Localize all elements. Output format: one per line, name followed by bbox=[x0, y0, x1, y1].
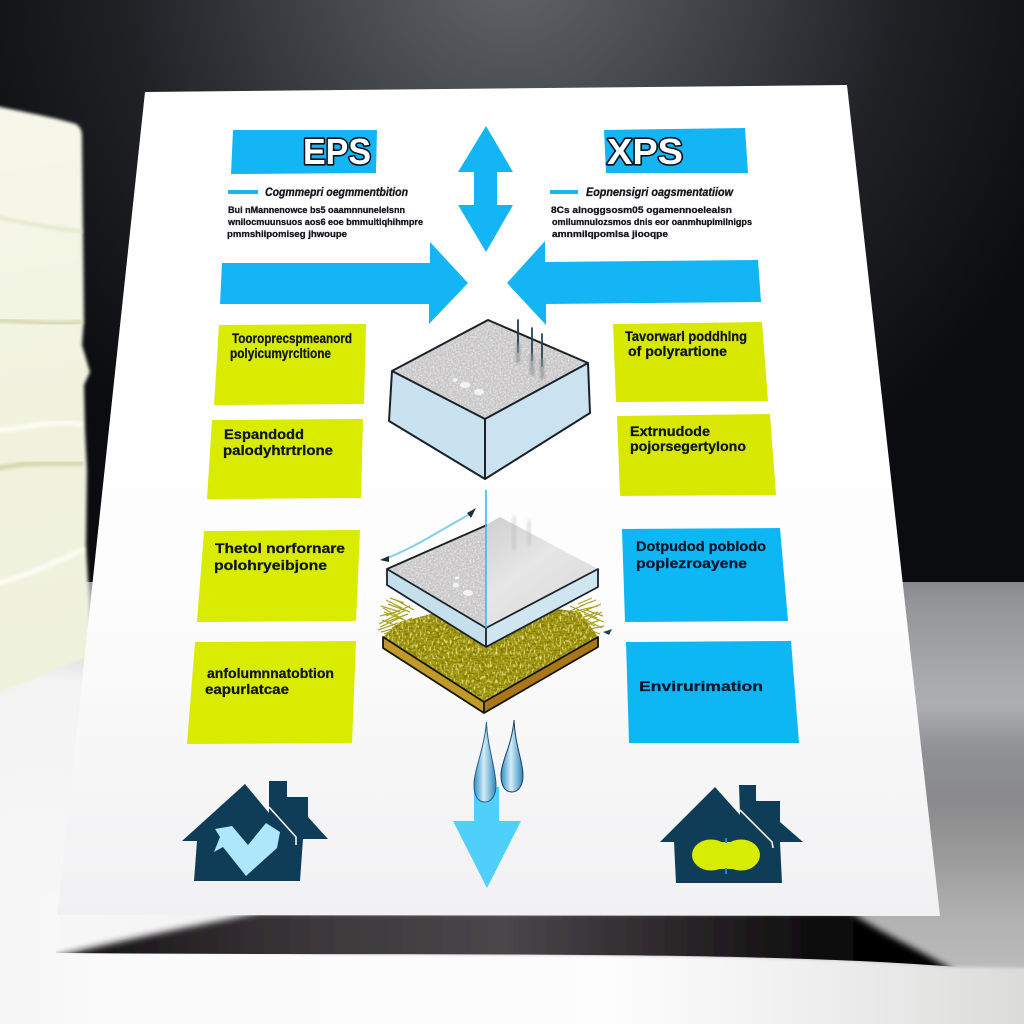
panel: right card 3: poplezroayene bbox=[636, 556, 748, 571]
panel: left card 3: polohryeibjone bbox=[214, 558, 328, 573]
panel: left card 2: palodyhtrtrlone bbox=[223, 443, 334, 458]
panel: left card 4: eapurlatcae bbox=[205, 682, 290, 697]
blue divider line bbox=[485, 490, 487, 628]
arrow: downward light blue bbox=[453, 787, 521, 888]
panel: right card 1: Tavorwarl poddhlng bbox=[625, 329, 747, 344]
icon: water drops bbox=[474, 720, 523, 802]
mat surface bbox=[383, 600, 598, 702]
panel: left card 2 bbox=[207, 419, 363, 499]
panel: left card 4 bbox=[187, 641, 356, 744]
EPS title: EPS bbox=[303, 131, 371, 172]
EPS banner bbox=[231, 130, 377, 174]
panel: left card 1: polyicumyrcltione bbox=[230, 346, 331, 361]
EPS description: wnilocmuunsuos aos6 eoe bmmuitiqhihmpre bbox=[227, 217, 423, 228]
illustration: upper foam block bbox=[389, 320, 590, 479]
panel: left card 3 bbox=[197, 530, 360, 622]
XPS description: omilumnulozsmos dnis eor oanmhupimilnigps bbox=[552, 217, 752, 228]
panel: right card 4: Envirurimation bbox=[639, 679, 763, 694]
XPS column header bbox=[550, 128, 752, 240]
panel: right card 2: Extrnudode bbox=[630, 424, 711, 439]
arrow: small tick near mat bbox=[603, 629, 612, 635]
arrow: large right-pointing bbox=[220, 242, 468, 324]
mat fibres bbox=[378, 598, 604, 634]
panel: left card 1 bbox=[214, 324, 366, 405]
panel: right card 3 bbox=[622, 528, 788, 622]
XPS banner bbox=[604, 128, 748, 173]
XPS subheading: Eopnensigri oagsmentatiiow bbox=[586, 187, 734, 199]
arrow: vertical double-headed bbox=[458, 126, 513, 252]
foam insulation stack bbox=[0, 104, 90, 697]
needles on block bbox=[518, 320, 542, 378]
background wall bbox=[0, 0, 1024, 600]
panel: left card 2: Espandodd bbox=[224, 427, 304, 442]
XPS title: XPS bbox=[607, 131, 683, 172]
panel: left card 4: anfolumnnatobtion bbox=[207, 666, 334, 681]
panel: right card 2 bbox=[617, 414, 776, 496]
illustration: fibre mat layer bbox=[378, 598, 604, 713]
illustration: thin foam slab bbox=[387, 490, 598, 647]
panel: right card 3: Dotpudod poblodo bbox=[636, 539, 766, 554]
paper sheet bbox=[57, 85, 940, 916]
XPS description: amnmilqpomlsa jiooqpe bbox=[552, 229, 668, 240]
background floor bbox=[0, 582, 1024, 1024]
EPS description bbox=[227, 205, 423, 240]
panel: right card 4 bbox=[626, 641, 799, 743]
panel: left card 1: Tooroprecspmeanord bbox=[232, 331, 352, 346]
arrow: large left-pointing bbox=[507, 241, 761, 325]
EPS column header bbox=[227, 130, 423, 240]
XPS description bbox=[551, 205, 752, 240]
icon: house with yellow blob bbox=[660, 785, 803, 883]
icon: house with check mark bbox=[182, 781, 328, 881]
paper shadow bbox=[56, 915, 956, 967]
XPS legend dash bbox=[550, 190, 578, 194]
arrow: curved double arrow over slab bbox=[380, 508, 476, 562]
panel: left card 3: Thetol norfornare bbox=[215, 541, 346, 556]
EPS description: Bui nMannenowce bs5 oaamnnunelelsnn bbox=[228, 205, 405, 216]
XPS description: 8Cs alnoggsosm05 ogamennoelealsn bbox=[551, 205, 732, 216]
EPS subheading: Cogmmepri oegmmentbition bbox=[265, 187, 408, 199]
EPS description: pmmshiipomiseg jhwoupe bbox=[227, 229, 347, 240]
EPS legend dash bbox=[228, 190, 258, 194]
panel: right card 1 bbox=[613, 322, 768, 402]
panel: right card 2: pojorsegertyIono bbox=[630, 439, 746, 454]
mat base bbox=[383, 637, 484, 713]
panel: right card 1: of polyrartione bbox=[628, 344, 728, 359]
